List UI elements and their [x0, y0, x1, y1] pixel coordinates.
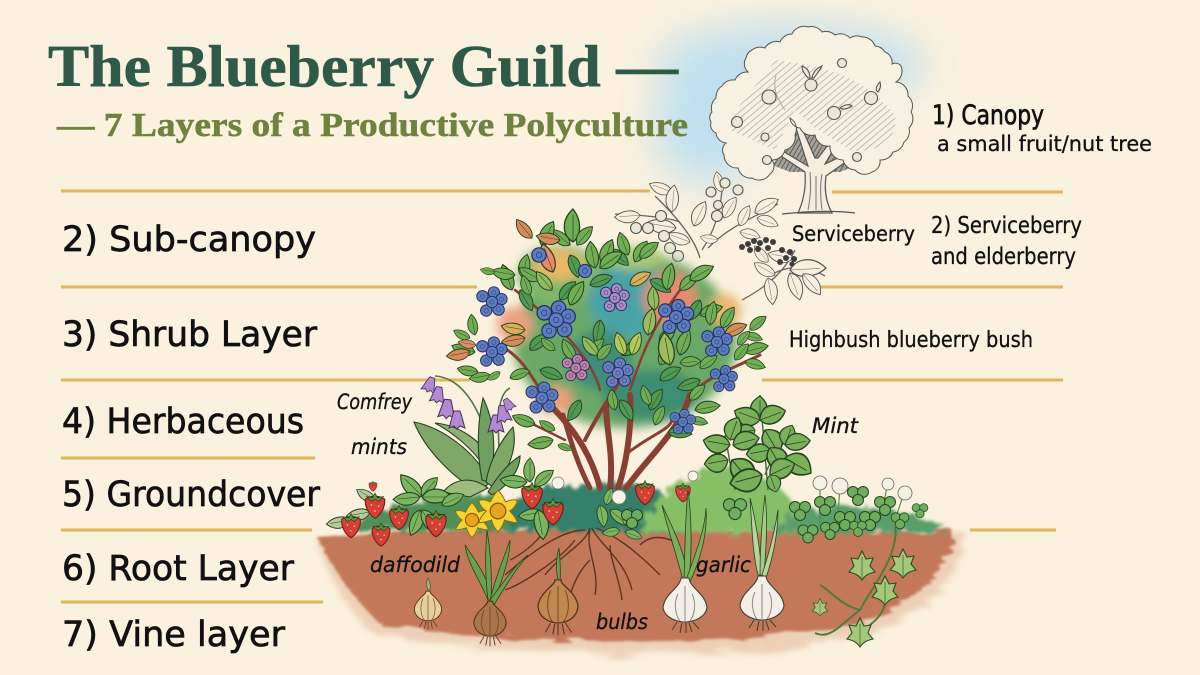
- layer labels: [62, 220, 321, 655]
- leaves: [446, 209, 769, 453]
- plant labels: Serviceberry: [792, 222, 915, 246]
- strawberry leaves: [326, 458, 644, 542]
- blueberry clusters: [477, 248, 737, 434]
- illustration: serviceberry and elderberry line art: [614, 171, 826, 306]
- illustration: daffodil: [456, 490, 528, 605]
- plant labels: bulbs: [596, 610, 648, 634]
- layer labels: 4) Herbaceous: [62, 402, 304, 442]
- soil fade: [316, 529, 965, 654]
- plant labels: daffodild: [370, 553, 461, 577]
- label: serviceberry and elderberry: and elderberry: [931, 244, 1076, 270]
- line-art leaves: [647, 179, 674, 198]
- layer labels: 7) Vine layer: [62, 615, 286, 655]
- label: canopy: a small fruit/nut tree: [937, 132, 1152, 156]
- grass left: [345, 495, 510, 532]
- sky wash: [655, 25, 925, 183]
- illustration: comfrey: [414, 375, 520, 497]
- strawberry fruits: [342, 514, 360, 538]
- illustration: clover: [622, 476, 928, 543]
- soil body: [318, 529, 955, 642]
- elderberries: [739, 237, 797, 267]
- layer labels: 6) Root Layer: [62, 549, 295, 589]
- layer labels: 5) Groundcover: [62, 475, 321, 515]
- plant labels: Mint: [812, 414, 859, 438]
- branches: [615, 190, 825, 300]
- fruits: [732, 58, 881, 164]
- tree trunk: [778, 126, 857, 213]
- grass light: [640, 469, 805, 533]
- plant labels: Highbush blueberry bush: [789, 328, 1033, 353]
- label: canopy: 1) Canopy: [932, 100, 1044, 131]
- illustration: strawberries: [326, 458, 698, 546]
- label: serviceberry and elderberry: [931, 213, 1082, 270]
- subtitle: — 7 Layers of a Productive Polyculture: [56, 107, 688, 144]
- layer labels: 3) Shrub Layer: [62, 315, 318, 355]
- trunk shading: [808, 172, 822, 210]
- tree crown: [710, 26, 913, 180]
- illustration: mint: [702, 395, 817, 496]
- plant labels: Comfrey: [337, 390, 412, 414]
- label: serviceberry and elderberry: 2) Serviceberry: [931, 213, 1082, 239]
- crown lobe: [775, 75, 785, 110]
- illustration: canopy tree: [710, 26, 913, 214]
- crown shading: [730, 60, 896, 151]
- comfrey leaves: [414, 398, 520, 497]
- illustration: garlic: [662, 490, 784, 633]
- illustration: blueberry bush: [446, 209, 769, 488]
- title: The Blueberry Guild —: [48, 33, 679, 99]
- illustration: soil: [316, 529, 965, 654]
- illustration: onion bulbs: [414, 548, 578, 646]
- white blossom: [552, 471, 698, 504]
- illustration: vine: [812, 525, 916, 647]
- stems: [500, 290, 760, 488]
- divider lines: [61, 191, 1063, 602]
- daffodil blooms: [456, 502, 488, 538]
- grass dark: [500, 484, 680, 533]
- daffodil stem and leaves: [465, 530, 528, 605]
- plant labels: mints: [351, 435, 407, 459]
- label: canopy: [932, 100, 1152, 156]
- plant labels: garlic: [696, 553, 751, 577]
- comfrey bells: [421, 375, 516, 433]
- illustration: grass: [345, 469, 945, 533]
- layer labels: 2) Sub-canopy: [62, 220, 316, 260]
- pale berries: [630, 178, 743, 262]
- grass right: [770, 507, 945, 533]
- illustration: roots: [505, 528, 680, 600]
- comfrey stems: [435, 376, 510, 470]
- foliage colour wash: [497, 245, 741, 428]
- plant labels: [337, 222, 1033, 634]
- ground tuft: [782, 211, 855, 214]
- inner leaves: [516, 245, 705, 424]
- branch shade: [772, 118, 858, 172]
